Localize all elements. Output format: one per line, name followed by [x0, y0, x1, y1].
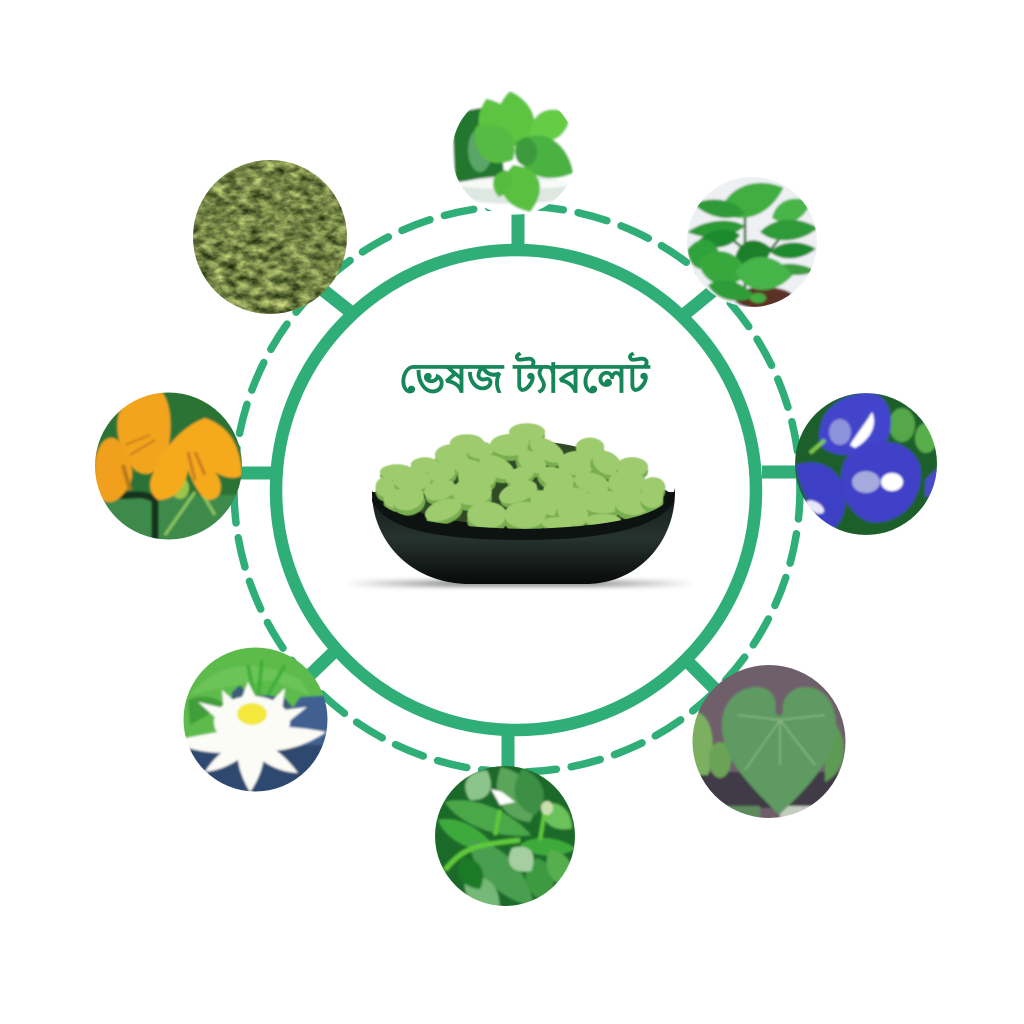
bowl shadow: [345, 580, 695, 587]
icon: water lily photo: [180, 646, 332, 796]
tablets: [376, 423, 665, 536]
icon: green herb photo: [435, 766, 575, 906]
icon: dried leaves photo: [190, 158, 350, 316]
icon: mint leaves photo: [452, 91, 574, 215]
icon: butterfly pea flowers photo: [794, 392, 939, 537]
connectors: [240, 212, 800, 768]
bowl of tablets: [345, 423, 695, 587]
title: ভেষজ ট্যাবলেট: [399, 352, 650, 401]
dashed outer ring: [234, 206, 800, 772]
infographic: herbal tablet ingredients diagram: [95, 91, 937, 906]
icon: yellow senna flowers photo: [93, 390, 245, 542]
bowl body: [372, 492, 675, 584]
bowl rim front: [372, 488, 675, 540]
icon: ginkgo plant photo: [683, 173, 820, 310]
main ring: [276, 250, 756, 730]
tablet mound shadow: [392, 440, 650, 525]
icon: heart leaf photo: [690, 663, 848, 821]
